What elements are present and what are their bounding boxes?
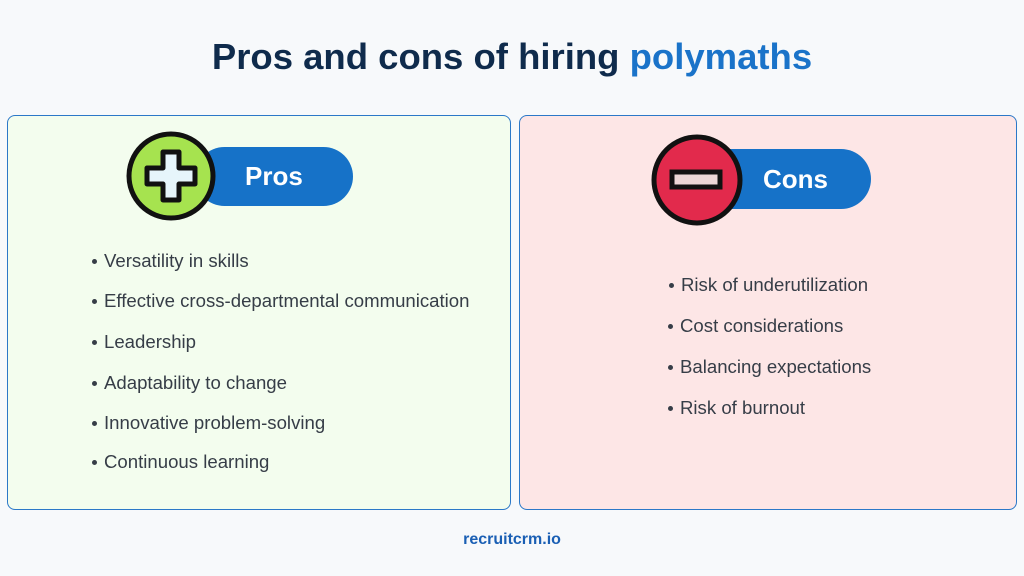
footer: recruitcrm.io — [463, 531, 561, 548]
pros list — [92, 250, 470, 472]
panel: pros — [7, 115, 511, 510]
pros list: Leadership — [104, 331, 196, 352]
cons list: Risk of burnout — [680, 397, 805, 418]
icon: plus — [126, 132, 216, 220]
title: Pros and cons of hiring polymaths — [212, 36, 812, 77]
cons list: Balancing expectations — [680, 356, 871, 377]
panel: cons — [519, 115, 1017, 510]
pros list: Adaptability to change — [104, 372, 287, 393]
pros list: Continuous learning — [104, 451, 269, 472]
cons list: Cost considerations — [680, 315, 843, 336]
pros pill — [195, 147, 353, 206]
pros list: Effective cross-departmental communication — [104, 290, 470, 311]
pros list: Innovative problem-solving — [104, 412, 325, 433]
cons list — [668, 274, 871, 418]
cons pill: Cons — [763, 164, 828, 194]
icon: minus — [652, 134, 742, 226]
pros list: Versatility in skills — [104, 250, 249, 271]
pros pill: Pros — [245, 161, 303, 191]
cons pill — [695, 149, 871, 209]
cons list: Risk of underutilization — [681, 274, 868, 295]
